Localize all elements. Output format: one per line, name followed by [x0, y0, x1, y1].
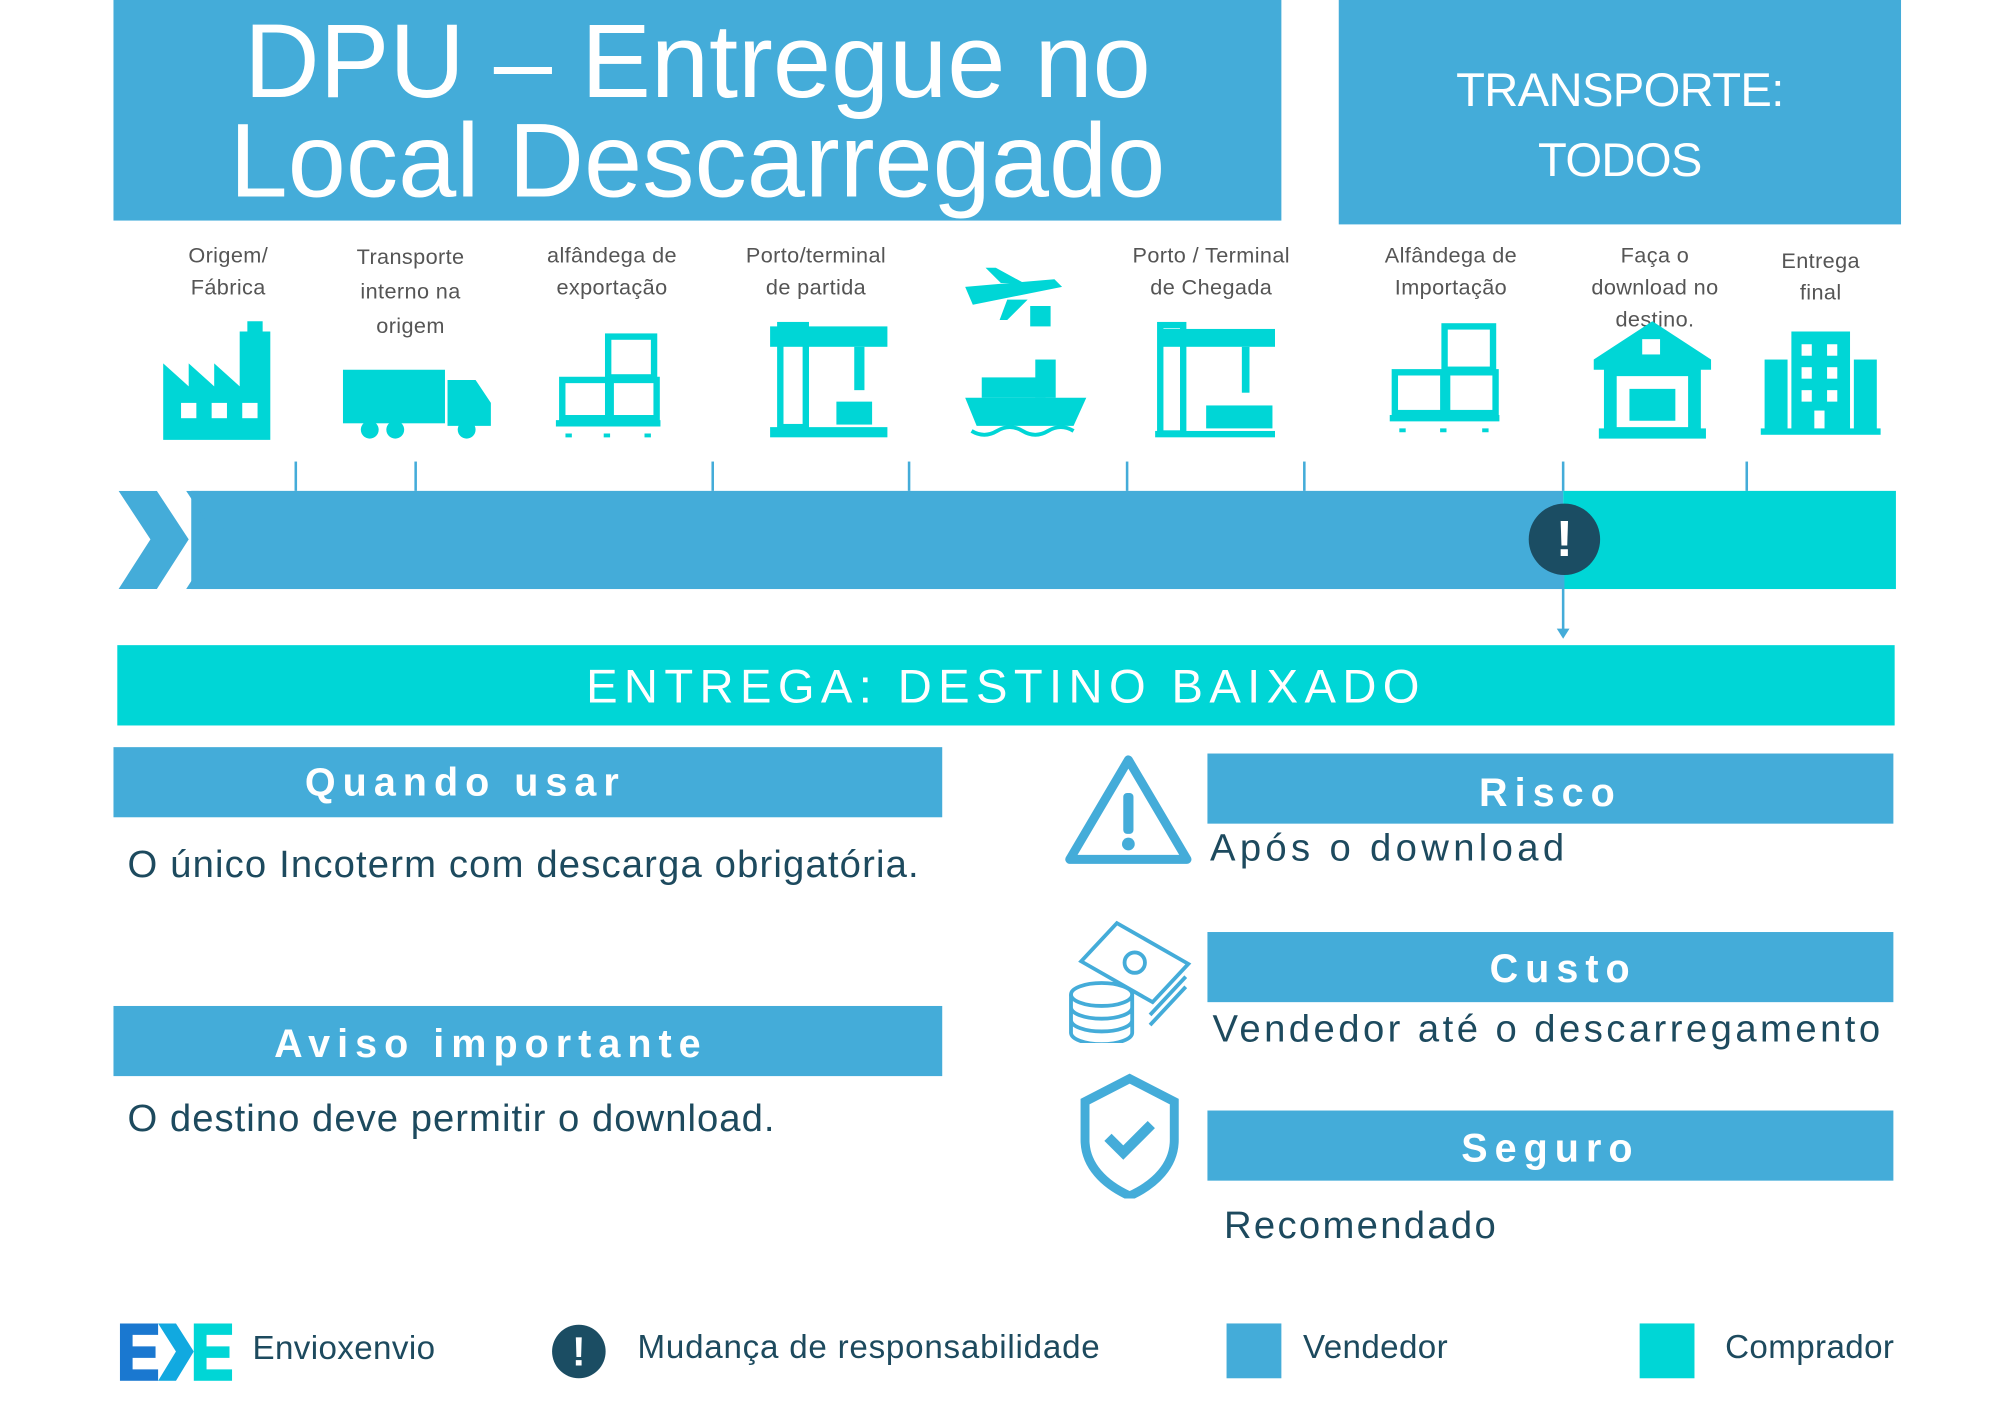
step labels: Entrega — [1781, 249, 1860, 273]
banner — [117, 645, 1895, 725]
banner: ENTREGA: DESTINO BAIXADO — [586, 660, 1426, 713]
panel: seguro: Seguro — [1461, 1126, 1640, 1170]
panel: seguro — [1207, 1110, 1894, 1247]
step labels: Origem/ — [188, 244, 268, 268]
responsibility marker — [1528, 504, 1600, 639]
legend: Vendedor — [1303, 1327, 1448, 1366]
transport box: TRANSPORTE: — [1456, 64, 1784, 116]
icon: boxes import — [1390, 326, 1499, 432]
panel: custo: Custo — [1490, 946, 1637, 991]
panel: risco: Risco — [1479, 770, 1622, 815]
step labels: interno na — [360, 279, 461, 303]
step labels: Faça o — [1621, 244, 1689, 268]
panel: quando usar — [113, 747, 942, 886]
panel: aviso importante: O destino deve permitir o download. — [128, 1098, 776, 1140]
title box — [113, 0, 1281, 221]
chevrons — [118, 490, 198, 589]
legend: ! — [572, 1329, 586, 1374]
title box: Local Descarregado — [230, 103, 1165, 219]
step labels: destino. — [1615, 307, 1694, 332]
step labels: Porto/terminal — [746, 244, 886, 268]
icon: shield — [1080, 1074, 1179, 1198]
step labels: de Chegada — [1150, 275, 1272, 300]
panel: quando usar: O único Incoterm com descarga obrigatória. — [128, 844, 920, 886]
step labels: Importação — [1395, 275, 1507, 300]
panel: custo: Vendedor até o descarregamento — [1213, 1009, 1884, 1051]
icon: factory — [163, 321, 270, 440]
step labels: Porto / Terminal — [1132, 244, 1290, 268]
step labels: alfândega de — [547, 244, 677, 268]
title box: DPU – Entregue no — [244, 4, 1151, 120]
icon: truck — [343, 370, 491, 439]
step labels: de partida — [766, 275, 866, 300]
panel: seguro: Recomendado — [1224, 1205, 1498, 1247]
icon: crane departure — [770, 325, 887, 437]
step labels: exportação — [556, 275, 668, 300]
legend: Mudança de responsabilidade — [638, 1327, 1100, 1366]
legend: Envioxenvio — [252, 1329, 435, 1367]
step labels: final — [1800, 280, 1842, 305]
transport box — [1339, 0, 1901, 224]
step labels: Fábrica — [191, 275, 266, 300]
panel: aviso importante: Aviso importante — [274, 1021, 708, 1066]
step labels: origem — [376, 314, 445, 338]
step labels: Transporte — [357, 245, 464, 269]
icon: warning — [1065, 755, 1192, 864]
panel: custo — [1207, 932, 1894, 1051]
icon: plane + ship — [965, 268, 1086, 435]
ticks — [295, 462, 297, 491]
icon: boxes export — [556, 337, 660, 437]
step labels — [188, 244, 1860, 338]
responsibility marker: ! — [1556, 511, 1573, 567]
icons row — [163, 268, 1881, 440]
transport box: TODOS — [1538, 134, 1702, 186]
legend: Comprador — [1725, 1327, 1894, 1366]
icon: crane arrival — [1155, 325, 1275, 437]
timeline bar — [118, 490, 1896, 590]
panel: quando usar: Quando usar — [305, 760, 626, 805]
legend — [120, 1323, 1894, 1381]
panel: risco: Após o download — [1210, 827, 1568, 870]
icon: warehouse — [1594, 321, 1711, 439]
panel: risco — [1207, 754, 1894, 870]
icon: building — [1761, 332, 1881, 435]
logo — [120, 1324, 232, 1381]
panel: aviso importante — [113, 1006, 942, 1140]
step labels: download no — [1591, 275, 1719, 300]
icon: money — [1069, 920, 1192, 1043]
step labels: Alfândega de — [1385, 244, 1517, 268]
